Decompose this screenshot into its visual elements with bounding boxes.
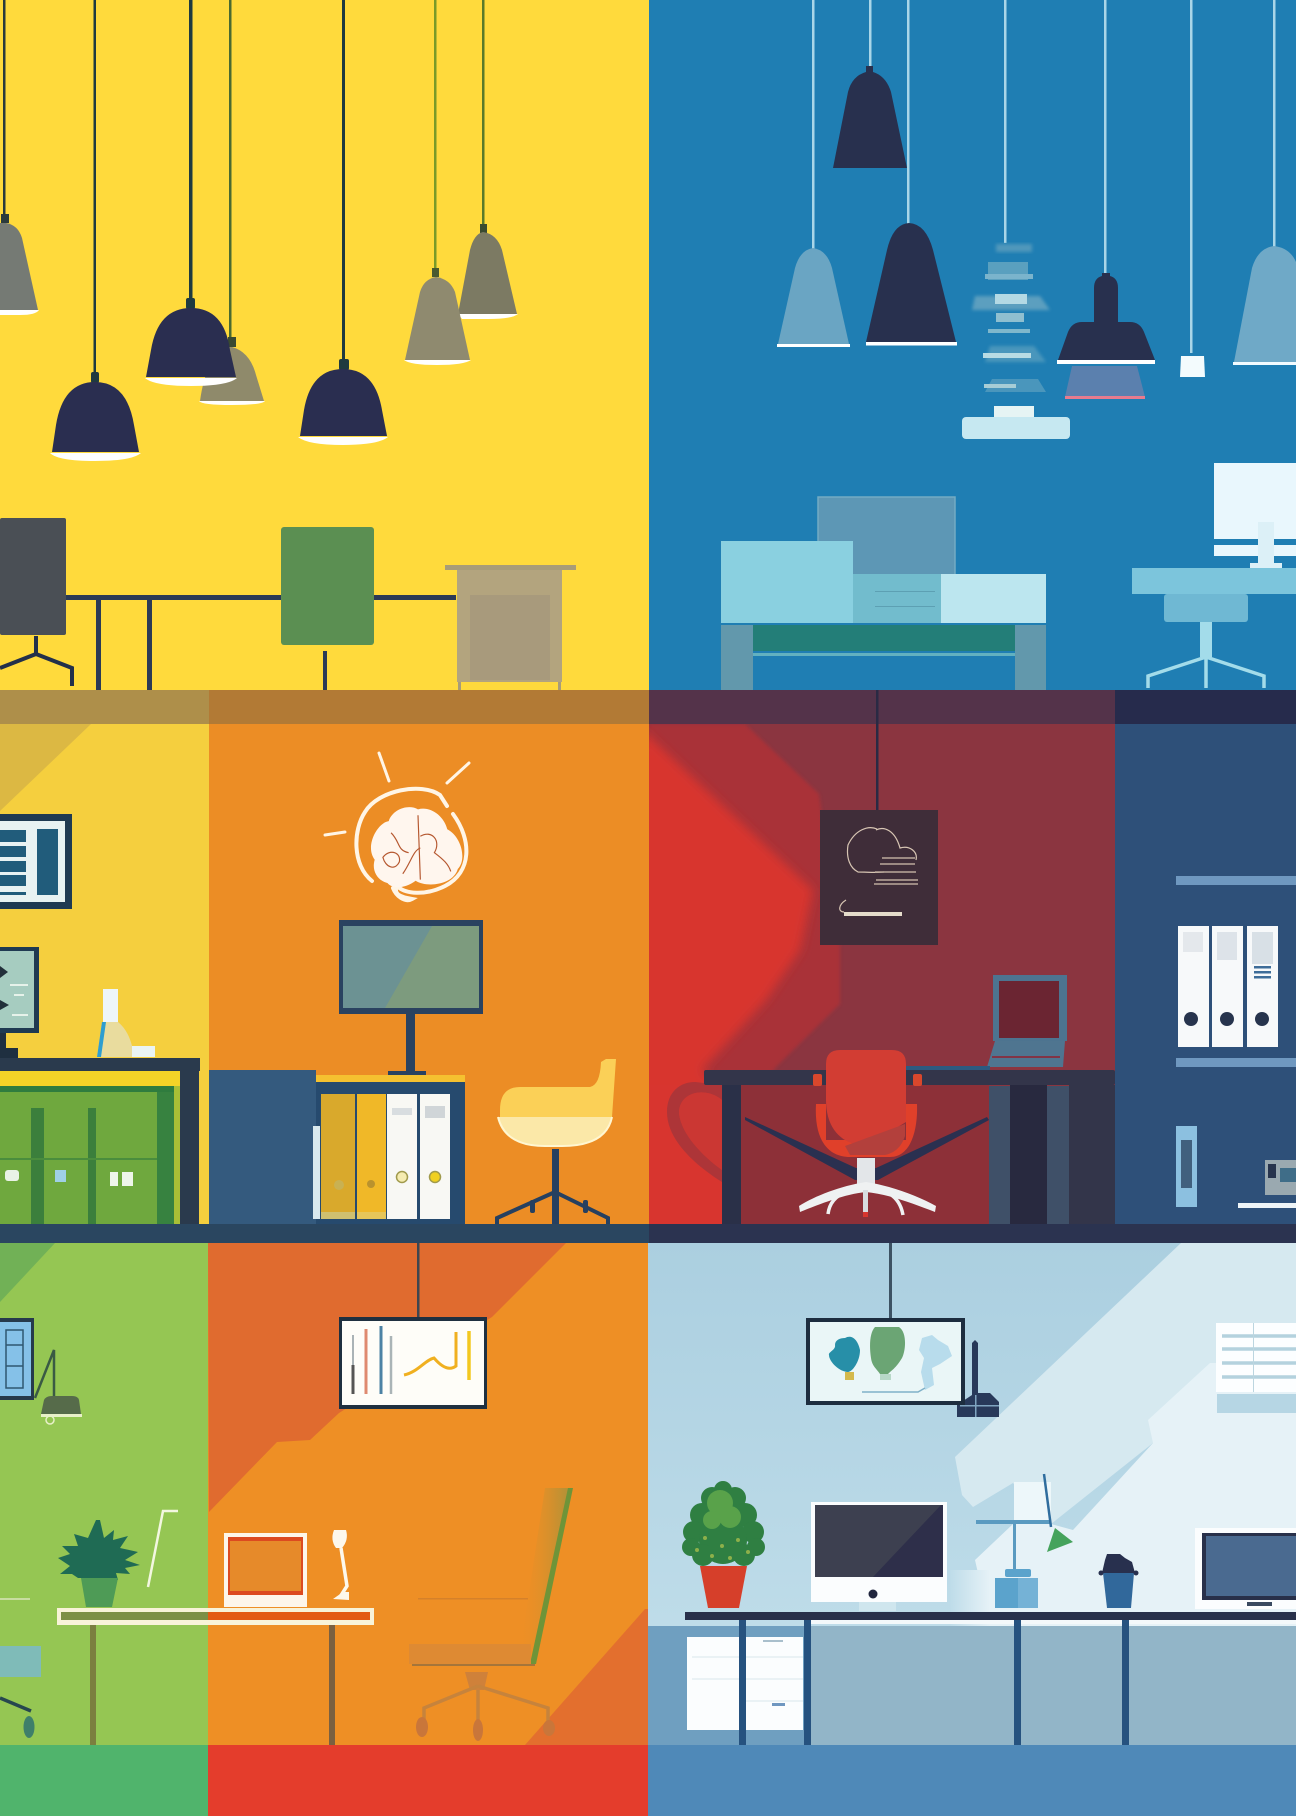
bottom band: coloured floor	[0, 1745, 1296, 1816]
plant: green room	[58, 1520, 140, 1607]
lamp: navy 3	[298, 0, 388, 445]
lamp: olive right back	[458, 0, 518, 319]
icon: brain light bulb	[325, 753, 469, 900]
panel: orange brain room	[209, 690, 649, 1224]
cabinet: green	[0, 1071, 180, 1224]
chart: hanging board	[339, 1317, 487, 1409]
book: blue spine	[1176, 1126, 1197, 1207]
lamp: navy top	[833, 66, 907, 168]
cord	[876, 690, 878, 810]
panel: orange chart room	[208, 1243, 648, 1745]
device: desk machine	[1238, 1160, 1296, 1208]
lamp: white thin	[148, 1511, 178, 1587]
lamp: wall arm	[35, 1350, 82, 1424]
poster: bars	[0, 814, 72, 909]
desk: blue room left	[721, 497, 1046, 690]
desk: yellow room	[0, 518, 576, 690]
lamp: pill base	[962, 406, 1070, 439]
plant: red pot	[682, 1481, 765, 1608]
desk: blue room right with monitor and chair	[1132, 463, 1296, 688]
lamp: light left	[777, 248, 850, 347]
floor bar: middle row	[0, 1224, 1296, 1243]
window poster	[0, 1318, 34, 1400]
desk: spanning green and orange rooms	[57, 1608, 374, 1745]
lamp: black behind poster	[957, 1340, 999, 1417]
cord	[417, 1243, 420, 1318]
monitor: on stand	[339, 920, 483, 1075]
desk: dark with cabinet	[704, 1066, 1115, 1224]
stray items left	[0, 1598, 41, 1738]
cabinet: navy with binders	[209, 1070, 465, 1224]
panel: yellow cabinet room	[0, 690, 209, 1224]
computer: desktop with stand	[811, 1502, 947, 1611]
panel: yellow ceiling lamps room	[0, 0, 649, 690]
lamp: navy with neck	[1057, 273, 1155, 399]
poster: dark cloud sketch	[820, 810, 938, 945]
monitor: partial	[0, 947, 39, 1058]
chair: yellow shell	[497, 1059, 616, 1224]
lamp: olive rear	[199, 0, 265, 405]
shelves	[1176, 876, 1296, 1067]
laptop	[987, 975, 1067, 1067]
lamp: dissolved stack	[972, 244, 1050, 392]
panel: red office room	[640, 690, 1115, 1224]
cup: navy pen holder	[1098, 1554, 1138, 1608]
computer: laptop right	[1195, 1528, 1296, 1609]
poster: brain shapes	[806, 1318, 965, 1405]
binders: white	[1178, 926, 1278, 1047]
lamp: light right	[1233, 246, 1296, 365]
desk: long dark	[685, 1612, 1296, 1745]
panel: light blue office room	[648, 1243, 1296, 1745]
panel: green room	[0, 1243, 208, 1745]
desk: dark frame	[0, 1058, 200, 1224]
lamp: navy 2	[145, 0, 237, 386]
desk items: bottle and papers	[97, 989, 155, 1057]
cords	[812, 0, 1276, 353]
lamp: navy 1	[50, 0, 141, 461]
lamp: desk with green cone	[976, 1474, 1073, 1608]
paper: wall sheet	[1216, 1323, 1296, 1413]
lamp: olive right front	[404, 0, 471, 365]
lamp: white desk	[332, 1530, 349, 1600]
cord	[889, 1243, 892, 1319]
chair: faded	[409, 1488, 573, 1741]
panel: blue ceiling lamps room	[649, 0, 1296, 690]
lamp: small white	[1180, 356, 1205, 377]
lamp: navy centre	[866, 223, 957, 346]
laptop: white outline	[224, 1533, 307, 1607]
lamp: grey left	[0, 0, 39, 315]
panel: navy shelving room	[1115, 690, 1296, 1224]
drawers: white	[687, 1637, 803, 1730]
chair: red office	[799, 1050, 936, 1217]
